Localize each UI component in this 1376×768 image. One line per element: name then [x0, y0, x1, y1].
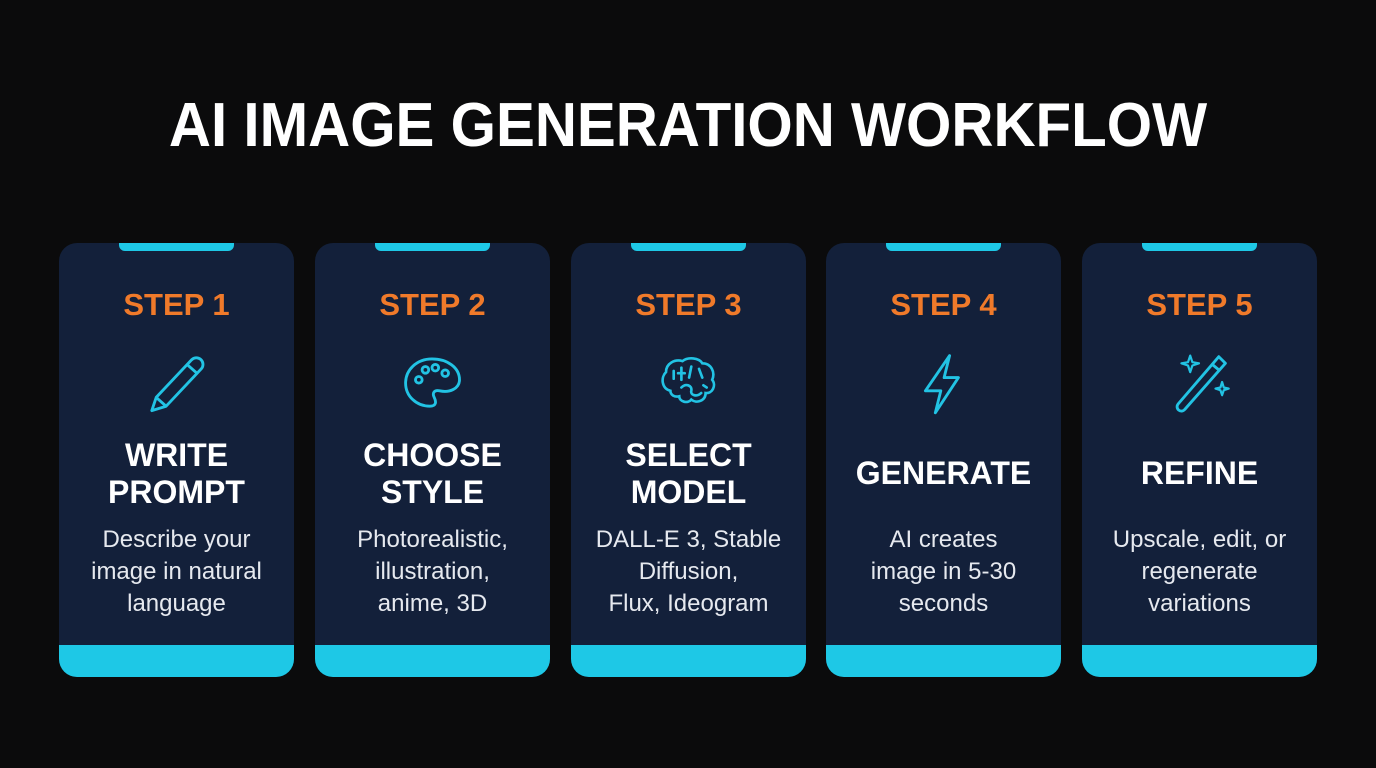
description: image in natural	[91, 558, 262, 585]
description: Photorealistic,	[357, 526, 508, 553]
step label: STEP 3	[635, 287, 742, 322]
icon: pencil	[150, 356, 204, 412]
heading: GENERATE	[856, 455, 1031, 491]
card: step 5	[1082, 243, 1317, 677]
description	[1113, 526, 1286, 617]
heading	[363, 437, 502, 510]
heading	[625, 437, 752, 510]
heading	[108, 437, 245, 510]
description: DALL-E 3, Stable	[596, 526, 781, 553]
description	[91, 526, 262, 617]
step label: STEP 4	[890, 287, 997, 322]
title: AI IMAGE GENERATION WORKFLOW	[169, 91, 1207, 160]
heading: WRITE	[125, 437, 228, 473]
step label: STEP 2	[379, 287, 486, 322]
description: regenerate	[1141, 558, 1258, 585]
card: step 3	[571, 243, 806, 677]
description: Flux, Ideogram	[608, 590, 769, 617]
card: step 4	[826, 243, 1061, 677]
description: seconds	[899, 590, 988, 617]
step label: STEP 5	[1146, 287, 1253, 322]
description: AI creates	[889, 526, 998, 553]
heading: STYLE	[381, 474, 484, 510]
description	[871, 526, 1016, 617]
heading: SELECT	[625, 437, 752, 473]
description: Describe your	[102, 526, 251, 553]
description: illustration,	[375, 558, 490, 585]
card: step 2	[315, 243, 550, 677]
icon: magic wand	[1176, 354, 1230, 412]
description: image in 5-30	[871, 558, 1016, 585]
description: Upscale, edit, or	[1113, 526, 1286, 553]
heading: PROMPT	[108, 474, 245, 510]
description: variations	[1148, 590, 1251, 617]
description: Diffusion,	[639, 558, 738, 585]
description	[596, 526, 781, 617]
heading: CHOOSE	[363, 437, 502, 473]
step label: STEP 1	[123, 287, 230, 322]
icon: brain	[661, 357, 716, 404]
icon: lightning	[924, 354, 960, 414]
heading: REFINE	[1141, 455, 1258, 491]
description: language	[127, 590, 226, 617]
description	[357, 526, 508, 617]
icon: palette	[404, 358, 461, 408]
heading: MODEL	[631, 474, 746, 510]
card: step 1	[59, 243, 294, 677]
description: anime, 3D	[378, 590, 487, 617]
